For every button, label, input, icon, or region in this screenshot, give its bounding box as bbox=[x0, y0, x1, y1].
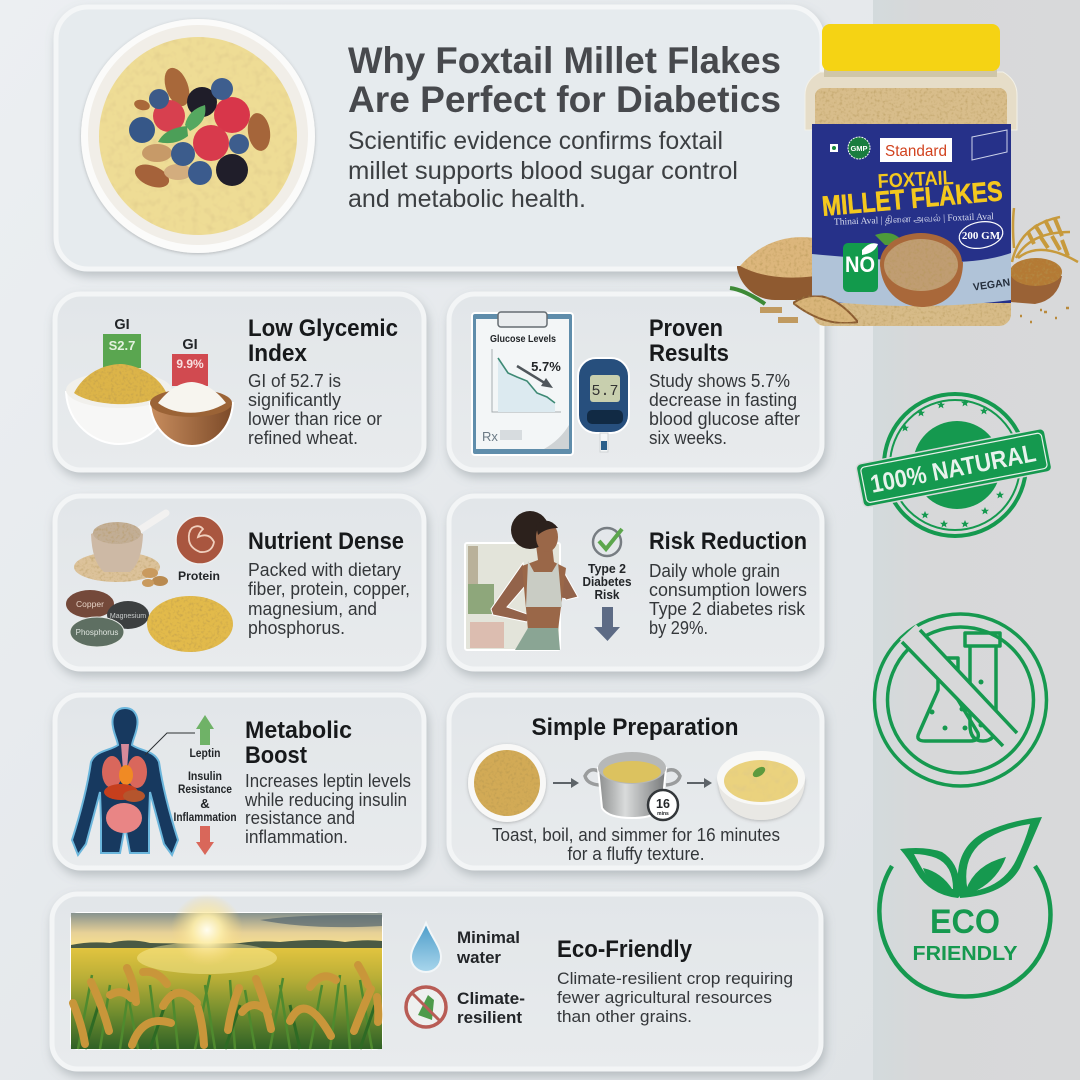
badge: no chemicals bbox=[874, 614, 1046, 786]
body text: GI of 52.7 is bbox=[248, 371, 341, 391]
arrow bbox=[553, 778, 579, 788]
body text: fiber, protein, copper, bbox=[248, 579, 410, 599]
label: minimal water: water bbox=[456, 948, 501, 967]
body text: for a fluffy texture. bbox=[568, 844, 704, 864]
body text: resistance and bbox=[245, 808, 355, 828]
body text: by 29%. bbox=[649, 618, 708, 638]
body text bbox=[492, 825, 780, 864]
heading bbox=[649, 315, 729, 367]
icon: mineral stones: Copper bbox=[76, 599, 104, 609]
body text: Climate-resilient crop requiring bbox=[557, 969, 793, 988]
label: no-badge: NO bbox=[845, 252, 875, 277]
icon: check and risk arrow: Diabetes bbox=[582, 575, 632, 589]
body text: refined wheat. bbox=[248, 428, 358, 448]
icon: cooking pot with timer bbox=[585, 752, 680, 820]
label: product name: Thinai Aval | தினை அவல் | Foxtail Aval bbox=[834, 211, 994, 228]
body text: decrease in fasting bbox=[649, 390, 797, 410]
icon: check and risk arrow bbox=[582, 528, 632, 641]
icon: glucose meter: 5.7 bbox=[591, 383, 619, 400]
body text: lower than rice or bbox=[248, 409, 382, 429]
arrow bbox=[687, 778, 712, 788]
icon: scoop of flakes bbox=[760, 296, 858, 323]
label: net weight: 200 GM bbox=[962, 230, 1001, 242]
text: insulin resistance and inflammation: Inflammation bbox=[174, 812, 236, 824]
icon: cooking pot with timer: 16 bbox=[656, 797, 670, 811]
subtitle: Scientific evidence confirms foxtail bbox=[348, 127, 723, 155]
heading: Boost bbox=[245, 742, 307, 769]
badge: 100% natural bbox=[856, 394, 1052, 536]
body text bbox=[244, 771, 411, 847]
text: insulin resistance and inflammation: Insulin bbox=[188, 771, 222, 783]
label: no-badge bbox=[843, 243, 878, 292]
heading: Proven bbox=[649, 315, 723, 342]
icon: up arrow leptin: Leptin bbox=[190, 748, 220, 760]
heading: Index bbox=[248, 340, 308, 367]
icon: jar label bowl bbox=[875, 233, 963, 307]
body text: Increases leptin levels bbox=[245, 771, 411, 791]
body text: Toast, boil, and simmer for 16 minutes bbox=[492, 825, 780, 845]
icon: clipboard with glucose chart: Rx bbox=[482, 429, 498, 444]
heading: Risk Reduction bbox=[649, 528, 807, 555]
subtitle: and metabolic health. bbox=[348, 185, 586, 213]
body text bbox=[248, 371, 382, 448]
text: insulin resistance and inflammation bbox=[174, 771, 236, 824]
body text: fewer agricultural resources bbox=[557, 988, 772, 1007]
icon: porridge bowl with berries bbox=[81, 19, 315, 253]
label: minimal water bbox=[456, 928, 520, 967]
label: brand logo: Standard bbox=[885, 143, 947, 160]
badge: eco friendly bbox=[879, 817, 1050, 996]
icon: no pests climate resilient bbox=[406, 987, 446, 1027]
body text: phosphorus. bbox=[248, 618, 345, 638]
heading: Results bbox=[649, 340, 729, 367]
body text: Study shows 5.7% bbox=[649, 371, 790, 391]
icon: clipboard with glucose chart: 5.7% bbox=[531, 359, 561, 374]
icon: protein muscle bbox=[176, 516, 224, 583]
label: product name bbox=[821, 167, 1004, 228]
body text: while reducing insulin bbox=[244, 790, 407, 810]
text: insulin resistance and inflammation: Resistance bbox=[178, 784, 232, 796]
body text: six weeks. bbox=[649, 428, 727, 448]
chart: GI tags and bowls: GI bbox=[182, 337, 198, 353]
icon: mineral stones: Magnesium bbox=[110, 613, 146, 620]
icon: wheat stalks bbox=[1012, 208, 1078, 262]
subtitle bbox=[348, 127, 738, 213]
label: climate-resilient: resilient bbox=[457, 1008, 522, 1027]
body text: Type 2 diabetes risk bbox=[649, 599, 806, 619]
icon: millet pile bbox=[147, 596, 233, 652]
subtitle: millet supports blood sugar control bbox=[348, 157, 738, 185]
label: brand logo: GMP bbox=[850, 144, 868, 153]
icon: mineral stones: Phosphorus bbox=[76, 628, 118, 637]
chart: GI tags and bowls: 9.9% bbox=[176, 357, 204, 371]
icon: down arrow bbox=[196, 826, 214, 855]
icon: raw millet plate bbox=[468, 744, 546, 822]
panel: proven results bbox=[449, 294, 822, 470]
heading: Eco-Friendly bbox=[557, 936, 693, 963]
badge: 100% natural: 100% NATURAL bbox=[868, 439, 1038, 499]
title bbox=[348, 40, 781, 120]
badge: eco friendly: FRIENDLY bbox=[912, 942, 1018, 965]
icon: check and risk arrow: Type 2 bbox=[588, 562, 626, 576]
text: insulin resistance and inflammation: & bbox=[200, 796, 210, 811]
body text bbox=[649, 371, 800, 448]
panel: nutrient dense bbox=[55, 496, 424, 669]
body text: consumption lowers bbox=[649, 580, 807, 600]
body text: Daily whole grain bbox=[649, 561, 780, 581]
icon: yellow lid bbox=[822, 24, 1000, 71]
icon: right bowl of seeds bbox=[1008, 258, 1069, 322]
body text: Packed with dietary bbox=[248, 560, 401, 580]
title: Are Perfect for Diabetics bbox=[348, 79, 781, 120]
icon: clipboard with glucose chart bbox=[472, 312, 573, 455]
icon: woman jogging bbox=[465, 511, 578, 650]
icon: up arrow leptin bbox=[190, 715, 220, 760]
body text: than other grains. bbox=[557, 1007, 692, 1026]
icon: human body organs bbox=[72, 708, 195, 855]
label: climate-resilient bbox=[457, 989, 525, 1027]
label: minimal water: Minimal bbox=[457, 928, 520, 947]
panel: eco-friendly bbox=[52, 894, 821, 1069]
chart: GI tags and bowls: GI bbox=[114, 317, 130, 333]
body text: significantly bbox=[248, 390, 341, 410]
panel: header bbox=[56, 7, 822, 269]
title: Why Foxtail Millet Flakes bbox=[348, 40, 781, 81]
icon: jar body bbox=[805, 68, 1017, 326]
icon: mineral stones bbox=[66, 590, 149, 647]
heading: Nutrient Dense bbox=[248, 528, 404, 555]
label: product name: FOXTAIL bbox=[877, 167, 954, 193]
body text bbox=[649, 561, 807, 638]
panel: risk reduction bbox=[449, 496, 822, 669]
body text: inflammation. bbox=[245, 827, 348, 847]
body text: blood glucose after bbox=[649, 409, 800, 429]
icon: water drop bbox=[411, 923, 441, 972]
panel: simple preparation bbox=[449, 695, 822, 868]
icon: left bowl of flakes bbox=[730, 237, 815, 304]
heading: Low Glycemic bbox=[248, 315, 398, 342]
icon: protein scoop bbox=[74, 513, 168, 587]
heading: Metabolic bbox=[245, 717, 352, 744]
icon: protein muscle: Protein bbox=[178, 569, 220, 583]
body text: magnesium, and bbox=[248, 599, 377, 619]
label: product name: MILLET FLAKES bbox=[821, 175, 1004, 222]
icon: glucose meter bbox=[578, 358, 629, 452]
panel: metabolic boost bbox=[55, 695, 424, 868]
badge: eco friendly: ECO bbox=[930, 903, 1000, 941]
image: millet field at sunrise bbox=[70, 894, 383, 1050]
chart: GI tags and bowls bbox=[66, 317, 233, 446]
icon: clipboard with glucose chart: Glucose Levels bbox=[490, 333, 556, 345]
label: net weight bbox=[957, 218, 1005, 252]
heading bbox=[245, 717, 352, 769]
label: brand logo bbox=[830, 130, 1007, 162]
product: millet flakes jar bbox=[730, 24, 1078, 326]
body text bbox=[248, 560, 410, 638]
heading bbox=[248, 315, 398, 367]
heading: Simple Preparation bbox=[532, 714, 738, 741]
chart: GI tags and bowls: S2.7 bbox=[109, 338, 135, 353]
icon: cooking pot with timer: mins bbox=[657, 811, 669, 817]
icon: check and risk arrow: Risk bbox=[594, 588, 620, 602]
body text bbox=[557, 969, 793, 1026]
icon: cooked millet bowl bbox=[717, 751, 805, 820]
panel: low glycemic index bbox=[55, 294, 424, 470]
label: climate-resilient: Climate- bbox=[457, 989, 525, 1008]
label: vegan: VEGAN bbox=[972, 276, 1011, 294]
